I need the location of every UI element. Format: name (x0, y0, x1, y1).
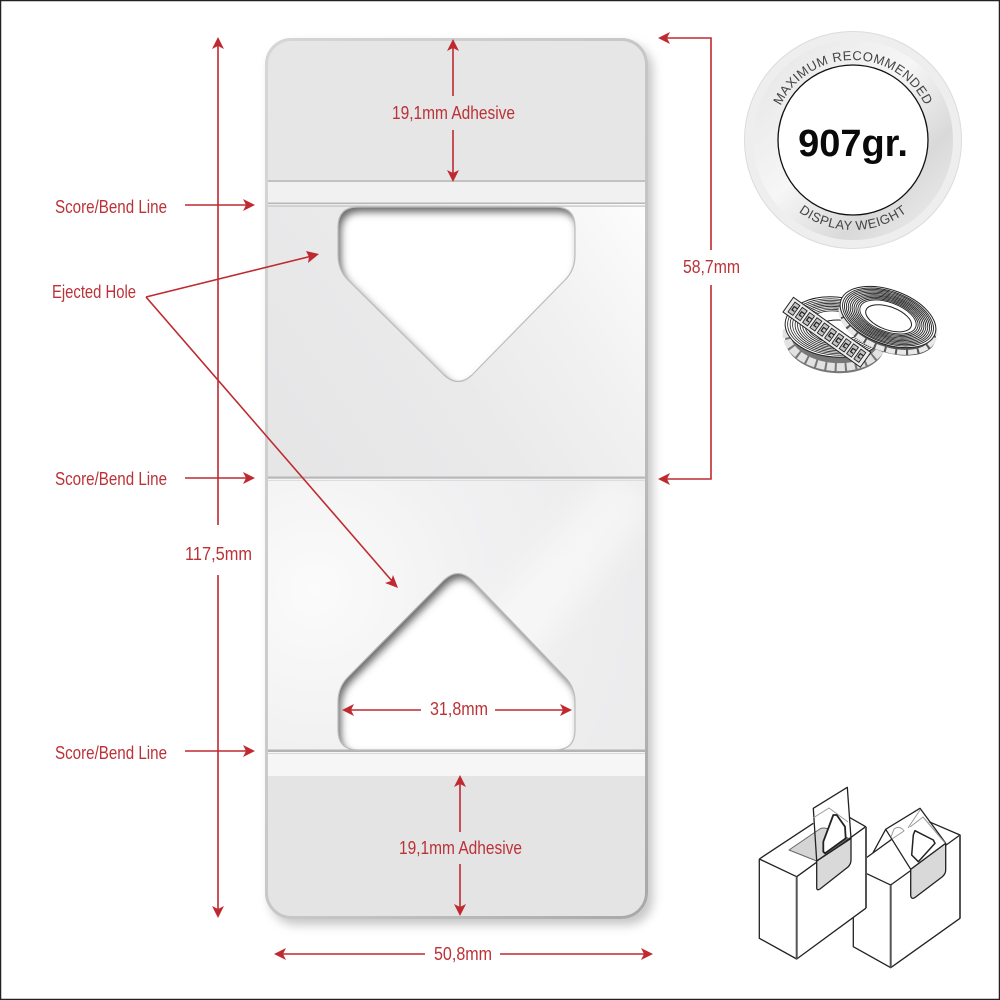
upper panel (556, 204, 645, 336)
ejected hole: bottom (337, 572, 576, 750)
dimension: 31,8mm: 31,8mm (430, 699, 488, 719)
badge value: 907gr. (798, 123, 908, 165)
label: score line 1: Score/Bend Line (55, 197, 167, 217)
badge text: bottom: DISPLAY WEIGHT (800, 204, 904, 230)
dimension: 50,8mm (274, 944, 653, 964)
left box (759, 787, 866, 959)
dimension: 31,8mm (342, 699, 572, 719)
card base (265, 38, 648, 919)
right box grey tab (911, 843, 946, 898)
label: ejected hole: Ejected Hole (52, 282, 136, 302)
score lines (265, 180, 648, 754)
label: ejected hole (52, 251, 398, 588)
label: score line 2: Score/Bend Line (55, 469, 167, 489)
top score band (265, 181, 648, 204)
left box clear tab (813, 787, 851, 861)
card border (266, 40, 646, 918)
bottom adhesive zone (265, 776, 648, 919)
right box tent (866, 808, 946, 869)
strip of tabs (783, 297, 871, 367)
dimension: top adhesive: 19,1mm Adhesive (392, 103, 515, 123)
dimension: top adhesive (392, 39, 515, 182)
dimension: bottom adhesive (399, 775, 522, 916)
dimension: 58,7mm (658, 32, 740, 485)
card shadow (270, 44, 653, 925)
label: score line 3 (55, 743, 255, 763)
dimension: bottom adhesive: 19,1mm Adhesive (399, 838, 522, 858)
badge: maximum recommended display weight (744, 31, 962, 249)
right box (853, 808, 960, 968)
dimension: 58,7mm: 58,7mm (683, 257, 740, 277)
upper roll (832, 275, 944, 367)
lower panel (268, 512, 393, 670)
icon: tape rolls (782, 275, 944, 377)
bottom score band (265, 750, 648, 776)
top adhesive zone (265, 38, 648, 181)
hang tab card (265, 38, 648, 919)
ejected hole: top (337, 206, 576, 382)
lower panel gloss streak (605, 505, 620, 528)
dimension: overall height 117,5mm (185, 37, 252, 918)
label: score line 1 (55, 197, 255, 217)
dimension: 50,8mm: 50,8mm (434, 944, 492, 964)
label: score line 2 (55, 469, 255, 489)
label: score line 3: Score/Bend Line (55, 743, 167, 763)
left box grey tab (817, 838, 851, 890)
dimension: overall height 117,5mm: 117,5mm (185, 544, 252, 564)
lower roll (782, 293, 888, 377)
badge text: top: MAXIMUM RECOMMENDED (773, 51, 932, 105)
left box grey well (789, 828, 848, 861)
icon: boxes with hang tabs (759, 787, 960, 968)
